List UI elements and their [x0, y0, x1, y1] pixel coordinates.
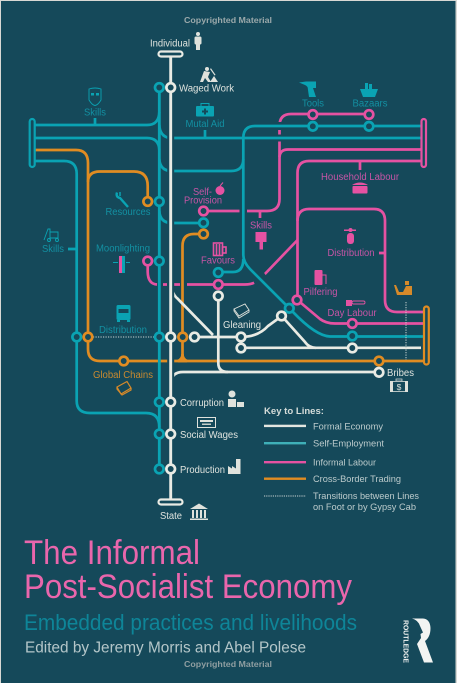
key: formal economy — [264, 422, 383, 432]
central trunk line — [159, 57, 171, 500]
dotted transition lines — [93, 302, 406, 360]
icon: bribe taker — [394, 281, 412, 295]
station label: Household Labour: Household Labour — [321, 172, 400, 183]
teal lines: self-employment — [35, 87, 424, 469]
icon: parcel white — [234, 304, 249, 318]
subtitle: Embedded practices and livelihoods — [24, 610, 357, 635]
icon: digger — [200, 67, 218, 82]
right terminus orange — [424, 306, 429, 364]
icon: welding mask — [89, 88, 101, 106]
key: self-employment — [264, 438, 384, 448]
station label: Corruption: Corruption — [180, 398, 224, 409]
station label: Bazaars: Bazaars — [352, 98, 388, 110]
title: Post-Socialist Economy — [24, 568, 352, 606]
station label: Moonlighting: Moonlighting — [96, 244, 150, 254]
key: cross-border trading — [264, 474, 401, 484]
icon: person — [194, 32, 202, 50]
icon: chainsaw — [346, 300, 365, 306]
icon: wrench — [117, 192, 128, 207]
stations — [72, 83, 383, 473]
station label: Self-Provision: Self- — [193, 187, 212, 198]
station label: Resources: Resources — [106, 207, 150, 218]
key: transitions: on Foot or by Gypsy Cab — [313, 502, 416, 512]
pink lines: informal labour — [148, 114, 424, 324]
icon: pot — [352, 182, 368, 194]
title: The Informal — [24, 534, 200, 572]
key: cross-border trading: Cross-Border Trading — [313, 474, 401, 484]
icon: bank — [190, 504, 208, 520]
station label: Pilfering: Pilfering — [304, 287, 338, 298]
orange lines: cross-border trading — [35, 150, 425, 361]
key: informal labour: Informal Labour — [313, 458, 376, 468]
icon: truck — [116, 305, 130, 322]
icon: police officer — [228, 390, 244, 407]
gaps where teal crosses pink — [240, 122, 282, 287]
white lines: formal economy — [171, 290, 421, 384]
copyright note top: Copyrighted Material — [184, 15, 272, 25]
station label: Waged Work: Waged Work — [179, 84, 235, 94]
icon: petrol pump — [314, 270, 326, 285]
routledge logo: ROUTLEDGE — [402, 620, 410, 663]
left terminus — [30, 119, 35, 167]
station label: Distribution pink: Distribution — [328, 248, 374, 259]
icon: beer mug — [214, 243, 226, 256]
key: formal economy: Formal Economy — [313, 422, 383, 432]
station label: Production: Production — [180, 465, 225, 476]
key: informal labour — [264, 458, 376, 468]
station label: Self-Provision: Provision — [184, 196, 222, 206]
station label: Skills top: Skills — [84, 108, 106, 118]
icon: scooter — [344, 228, 356, 244]
station label: State: State — [160, 511, 182, 522]
icon: parcel orange — [117, 382, 131, 395]
icon: first aid case — [196, 104, 214, 116]
station label: Distribution teal: Distribution — [99, 325, 147, 336]
individual terminus — [158, 52, 182, 56]
icon: apple — [216, 182, 224, 195]
station label: Mutal Aid: Mutal Aid — [186, 119, 224, 130]
state terminus — [158, 500, 182, 504]
key heading: Key to Lines: — [264, 406, 324, 417]
station label: Global Chains: Global Chains — [93, 370, 153, 381]
station label: Social Wages: Social Wages — [180, 430, 238, 441]
icon: moonlighting figure — [113, 256, 130, 273]
station label: Favours: Favours — [201, 256, 235, 266]
icon: basket — [360, 83, 378, 97]
station label: Skills left: Skills — [42, 244, 64, 255]
title — [24, 534, 352, 606]
key: self-employment: Self-Employment — [313, 438, 384, 448]
copyright note bottom: Copyrighted Material — [184, 659, 272, 669]
station label: Gleaning: Gleaning — [223, 320, 261, 331]
right terminus pink — [422, 119, 426, 167]
station label: Individual: Individual — [150, 38, 190, 50]
key: transitions — [264, 491, 419, 512]
key: transitions: Transitions between Lines — [313, 491, 419, 501]
editors: Edited by Jeremy Morris and Abel Polese — [25, 640, 306, 656]
station label: Tools: Tools — [302, 98, 324, 110]
icon: money briefcase: $ — [397, 382, 402, 392]
station label: Bribes: Bribes — [387, 368, 414, 379]
icon: forklift — [44, 229, 58, 242]
routledge logo — [402, 618, 433, 663]
station label: Skills pink: Skills — [250, 220, 272, 232]
station label: Day Labour: Day Labour — [328, 308, 377, 319]
icon: factory — [228, 459, 240, 474]
key to lines — [264, 406, 419, 512]
icon: money briefcase — [390, 379, 408, 392]
station label: Self-Provision — [184, 187, 222, 206]
icon: drill — [299, 82, 316, 97]
icon: banknote — [198, 418, 216, 428]
icon: paint brush — [256, 232, 266, 250]
